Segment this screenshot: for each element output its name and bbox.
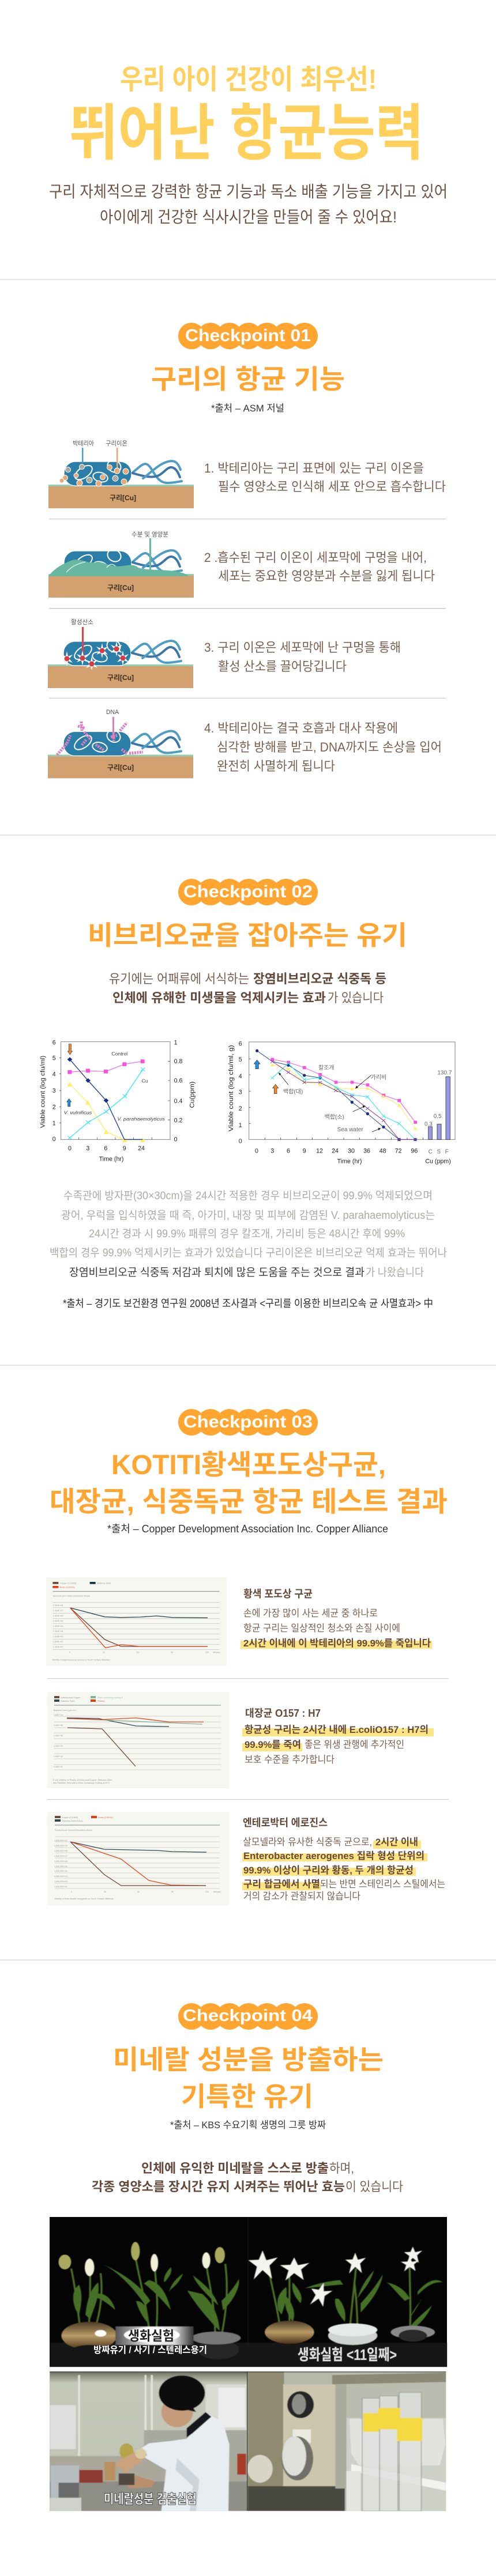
line and bar chart: shellfish vibrio count and copper <box>228 1041 455 1165</box>
chart: e.coli O157: Stainless Steel <box>61 1700 75 1702</box>
result text: staphylococcus: 손에 가장 많이 사는 세균 중 하나로 <box>243 1608 378 1619</box>
result text: e.coli: 대장균 O157 : H7 <box>245 1708 321 1719</box>
heading: vibrio: 비브리오균을 잡아주는 유기 <box>88 920 407 950</box>
heading: KOTITI test results: KOTITI황색포도상구균, <box>111 1450 386 1480</box>
diagram 1: bacteria meets copper ions: 구리이온 <box>106 440 127 447</box>
badge: checkpoint 02 <box>178 879 318 905</box>
line and bar chart: shellfish vibrio count and copper: F <box>445 1149 449 1155</box>
photo: mineral detection experiment <box>50 2371 446 2511</box>
chart: enterobacter aerogenes: 1,000,000+09 <box>54 1845 67 1847</box>
chart: staphylococcus aureus: 1.000E+07 <box>53 1610 63 1612</box>
line chart: vibrio count and Cu ppm by time: Control <box>111 1051 127 1057</box>
line and bar chart: shellfish vibrio count and copper: 1 <box>239 1122 242 1129</box>
chart: e.coli O157: 1.00E+02 <box>54 1755 63 1758</box>
line chart: vibrio count and Cu ppm by time: Time (hr) <box>99 1156 123 1163</box>
result text: e.coli: 항균성 구리는 2시간 내에 E.coliO157 : H7의 <box>245 1724 429 1735</box>
step 1 text: 필수 영양소로 인식해 세포 안으로 흡수합니다 <box>218 479 446 494</box>
line and bar chart: shellfish vibrio count and copper: 96 <box>411 1148 418 1155</box>
result text: staphylococcus: 황색 포도상 구균 <box>243 1588 313 1600</box>
panel: checkpoint 01 <box>48 323 446 778</box>
line and bar chart: shellfish vibrio count and copper: 가리비 <box>371 1074 386 1081</box>
chart: e.coli O157: 1.00E+10 <box>54 1714 63 1716</box>
study result text: 백합의 경우 99.9% 억제시키는 효과가 있었습니다 구리이온은 비브리오균 억제 효과는 뛰어나 <box>50 1247 447 1259</box>
result text: enterobacter: 되는 반면 스테인리스 스틸에서는 <box>320 1879 445 1890</box>
chart: e.coli O157: Silver-containing coating A <box>97 1697 123 1699</box>
step 4 text: 완전히 사멸하게 됩니다 <box>217 759 335 773</box>
step 4 text: 4. 박테리아는 결국 호흡과 대사 작용에 <box>204 721 398 735</box>
section divider <box>0 1365 496 1366</box>
study result text: 수족관에 방자판(30×30cm)을 24시간 적용한 경우 비브리오균이 99.9% 억제되었으며 <box>63 1189 433 1202</box>
line chart: vibrio count and Cu ppm by time: 4 <box>52 1071 56 1078</box>
chart: enterobacter aerogenes: Minutes <box>213 1891 221 1893</box>
result text: enterobacter: Enterobacter aerogenes 집락 형성 단위의 <box>243 1850 424 1861</box>
photo: lily flower experiment: 생화실험 <box>128 2328 174 2343</box>
chart: e.coli O157: Plastics <box>97 1700 105 1702</box>
chart: enterobacter aerogenes: 1,000,000+04 <box>54 1870 67 1872</box>
hero main title: 뛰어난 항균능력 <box>69 100 424 168</box>
result text: enterobacter: 2시간 이내 <box>375 1837 418 1848</box>
chart: enterobacter aerogenes: 1,000,000+02 <box>54 1880 67 1883</box>
chart: enterobacter aerogenes: 90 <box>171 1891 174 1893</box>
step 4 text: 심각한 방해를 받고, DNA까지도 손상을 입어 <box>217 740 442 754</box>
study result text: 광어, 우럭을 입식하였을 때 즉, 아가미, 내장 및 피부에 감염된 V. parahaemolyticus는 <box>61 1209 435 1222</box>
line chart: vibrio count and Cu ppm by time: 24 <box>138 1145 145 1152</box>
chart: e.coli O157: 1.00E+04 <box>54 1745 63 1747</box>
result text: enterobacter <box>242 1817 445 1902</box>
panel: checkpoint 03 <box>46 1409 449 1905</box>
badge: checkpoint 01 <box>178 323 318 349</box>
intro text: 이 있습니다 <box>345 2180 403 2194</box>
line chart: vibrio count and Cu ppm by time: 0 <box>52 1136 56 1143</box>
chart: staphylococcus aureus: Survivors per Carrier (Geometric Mean) <box>53 1595 90 1597</box>
line and bar chart: shellfish vibrio count and copper: 130.7 <box>437 1070 452 1076</box>
chart: enterobacter aerogenes: Brass (C26000) <box>98 1816 113 1819</box>
badge: checkpoint 01: Checkpoint 01 <box>185 326 311 345</box>
chart: staphylococcus aureus: 1.000E+05 <box>53 1620 63 1622</box>
heading: KOTITI test results: 대장균, 식중독균 항균 테스트 결과 <box>50 1487 448 1517</box>
chart: enterobacter aerogenes: 30 <box>104 1891 106 1893</box>
intro text: 인체에 유해한 미생물을 억제시키는 효과 <box>112 991 326 1005</box>
chart: enterobacter aerogenes: 1,000,000+08 <box>54 1850 67 1852</box>
line and bar chart: shellfish vibrio count and copper: 36 <box>363 1148 370 1155</box>
result text: enterobacter: 구리 합금에서 사멸 <box>243 1879 320 1890</box>
section divider <box>0 279 496 280</box>
chart: enterobacter aerogenes: 120 <box>205 1891 209 1893</box>
line chart: vibrio count and Cu ppm by time: 5 <box>52 1055 56 1062</box>
line chart: vibrio count and Cu ppm by time: V. vulnificus <box>64 1109 92 1115</box>
result text: e.coli <box>242 1708 434 1765</box>
diagram 1: bacteria meets copper ions: 구리[Cu] <box>110 494 136 502</box>
result text: staphylococcus: 2시간 이내에 이 박테리아의 99.9%를 죽입니다 <box>243 1638 431 1649</box>
line and bar chart: shellfish vibrio count and copper: 48 <box>379 1148 386 1155</box>
chart: staphylococcus aureus: Minutes <box>213 1652 220 1654</box>
line and bar chart: shellfish vibrio count and copper: 5 <box>239 1056 242 1063</box>
line chart: vibrio count and Cu ppm by time: V. parahaemolyticus <box>117 1116 165 1121</box>
chart: staphylococcus aureus: 1.000E+06 <box>53 1615 63 1617</box>
line chart: vibrio count and Cu ppm by time: 0.8 <box>174 1058 183 1065</box>
study result text: 가 나왔습니다 <box>366 1266 424 1279</box>
photo: lily flower experiment: 생화실험 <11일째> <box>298 2346 397 2363</box>
chart: enterobacter aerogenes: Stainless Steel (S304) <box>62 1820 82 1822</box>
study result text: 장염비브리오균 식중독 저감과 퇴치에 많은 도움을 주는 것으로 결과 <box>69 1266 365 1279</box>
line chart: vibrio count and Cu ppm by time: 3 <box>52 1087 56 1094</box>
line chart: vibrio count and Cu ppm by time: 0 <box>174 1136 178 1143</box>
line and bar chart: shellfish vibrio count and copper: 0 <box>255 1148 258 1155</box>
intro text: 각종 영양소를 장시간 유지 시켜주는 뛰어난 효능 <box>92 2180 345 2194</box>
line chart: vibrio count and Cu ppm by time <box>40 1039 196 1163</box>
line and bar chart: shellfish vibrio count and copper: 6 <box>287 1148 290 1155</box>
chart: enterobacter aerogenes: 1,000,000+01 <box>54 1886 67 1888</box>
line and bar chart: shellfish vibrio count and copper: 0.5 <box>434 1113 442 1120</box>
step 3 text <box>204 640 401 674</box>
line chart: vibrio count and Cu ppm by time: 1 <box>174 1039 178 1046</box>
line and bar chart: shellfish vibrio count and copper: 3 <box>270 1148 274 1155</box>
chart: staphylococcus aureus: Stainless Steel <box>97 1582 111 1584</box>
chart: enterobacter aerogenes: 1,000,000+06 <box>54 1860 67 1863</box>
intro text: 하며, <box>329 2161 354 2175</box>
section divider <box>0 834 496 836</box>
line chart: vibrio count and Cu ppm by time: Viable count (log cfu/ml) <box>40 1056 47 1128</box>
result text: e.coli: 좋은 위생 관행에 추가적인 <box>305 1739 404 1750</box>
photo: lily flower experiment <box>50 2217 447 2367</box>
result text: e.coli: 보호 수준을 추가합니다 <box>245 1754 335 1765</box>
panel: checkpoint 02 <box>40 879 455 1309</box>
step 2 text: 세포는 중요한 영양분과 수분을 잃게 됩니다 <box>218 569 435 583</box>
chart: enterobacter aerogenes: 1,000,000+03 <box>54 1875 67 1878</box>
intro text <box>92 2161 403 2194</box>
line and bar chart: shellfish vibrio count and copper: 4 <box>239 1073 242 1080</box>
chart: e.coli O157: Antimicrobial Copper <box>61 1697 81 1699</box>
study result text: 24시간 경과 시 99.9% 패류의 경우 칼조개, 가리비 등은 48시간 후에 99% <box>89 1227 405 1240</box>
chart: enterobacter aerogenes: 1,000,000+07 <box>54 1855 67 1857</box>
chart: enterobacter aerogenes: Viability of Enterobacter aerogenes on Touch Surface Materials <box>54 1898 114 1900</box>
chart: staphylococcus aureus: Copper (C11000) <box>60 1582 76 1584</box>
line and bar chart: shellfish vibrio count and copper: Time (hr) <box>337 1158 362 1165</box>
badge: checkpoint 03 <box>178 1409 318 1436</box>
chart: staphylococcus aureus: 60 <box>137 1652 139 1654</box>
line and bar chart: shellfish vibrio count and copper: C <box>429 1149 433 1155</box>
line and bar chart: shellfish vibrio count and copper: S <box>437 1149 441 1155</box>
intro text: 인체에 유익한 미네랄을 스스로 방출 <box>141 2161 329 2175</box>
step 2 text <box>204 550 435 583</box>
hero description: 구리 자체적으로 강력한 항균 기능과 독소 배출 기능을 가지고 있어 <box>49 183 448 201</box>
heading: copper antibacterial function: 구리의 항균 기능 <box>151 364 345 394</box>
chart: staphylococcus aureus <box>46 1577 227 1665</box>
line chart: vibrio count and Cu ppm by time: 1 <box>52 1120 56 1127</box>
chart: enterobacter aerogenes: 1,000,000+10 <box>54 1840 67 1842</box>
chart: e.coli O157: E.coli Viability on Plastic, Antimicrobial Copper, Stainless Steel, <box>53 1779 112 1781</box>
intro text: 유기에는 어패류에 서식하는 <box>109 972 249 986</box>
line and bar chart: shellfish vibrio count and copper: 6 <box>239 1041 242 1048</box>
chart: e.coli O157: Bacteria Count (per mL) <box>54 1709 76 1712</box>
hero section <box>49 65 448 226</box>
diagram 4: DNA damage: 구리[Cu] <box>107 764 134 772</box>
diagram 2: nutrients leaking from cell: 수분 및 영양분 <box>131 531 168 538</box>
line chart: vibrio count and Cu ppm by time: 0.4 <box>174 1098 183 1105</box>
chart: e.coli O157: 1.00E+08 <box>54 1724 63 1727</box>
line and bar chart: shellfish vibrio count and copper: Sea water <box>337 1127 363 1133</box>
chart: staphylococcus aureus: 0 <box>69 1652 70 1654</box>
diagram 1: bacteria meets copper ions: 박테리아 <box>73 440 94 447</box>
diagram 4: DNA damage: DNA <box>106 709 119 716</box>
line chart: vibrio count and Cu ppm by time: 0.6 <box>174 1078 183 1085</box>
line and bar chart: shellfish vibrio count and copper: Cu (ppm) <box>425 1158 451 1165</box>
chart: staphylococcus aureus: 1.000E+01 <box>53 1646 63 1648</box>
heading: mineral releasing brassware: 미네랄 성분을 방출하는 <box>113 2045 384 2075</box>
chart: enterobacter aerogenes: 0 <box>71 1891 72 1893</box>
heading: mineral releasing brassware <box>113 2045 384 2112</box>
chart: staphylococcus aureus: 120 <box>205 1652 209 1654</box>
chart: e.coli O157 <box>47 1692 229 1788</box>
step 3 text: 3. 구리 이온은 세포막에 난 구멍을 통해 <box>204 640 401 655</box>
chart: staphylococcus aureus: 90 <box>171 1652 173 1654</box>
photo: mineral detection experiment: 미네랄성분 검출실험 <box>104 2492 197 2506</box>
line chart: vibrio count and Cu ppm by time: Cu(ppm) <box>189 1082 196 1108</box>
chart: staphylococcus aureus: 1.000E+05 <box>53 1625 63 1627</box>
intro text <box>109 972 386 1005</box>
source note: *출처 – Copper Development Association Inc. Copper Alliance <box>107 1523 388 1535</box>
chart: staphylococcus aureus: 1.000E+04 <box>53 1630 63 1633</box>
diagram 2: nutrients leaking from cell: 구리[Cu] <box>107 584 134 592</box>
line chart: vibrio count and Cu ppm by time: 6 <box>52 1039 56 1046</box>
line chart: vibrio count and Cu ppm by time: 0 <box>68 1145 72 1152</box>
source note: *출처 – ASM 저널 <box>211 403 284 414</box>
line chart: vibrio count and Cu ppm by time: 2 <box>52 1104 56 1111</box>
badge: checkpoint 03: Checkpoint 03 <box>183 1412 313 1431</box>
heading: KOTITI test results <box>50 1450 448 1517</box>
line chart: vibrio count and Cu ppm by time: 3 <box>86 1145 89 1152</box>
step 1 text <box>204 461 446 494</box>
diagram 3: reactive oxygen: 구리[Cu] <box>107 674 134 682</box>
chart: staphylococcus aureus: 1.000E+03 <box>53 1636 63 1638</box>
intro text: 가 있습니다 <box>328 991 384 1005</box>
intro text: 장염비브리오균 식중독 등 <box>253 972 386 986</box>
line and bar chart: shellfish vibrio count and copper: 0.3 <box>424 1121 433 1127</box>
study result text <box>50 1189 447 1279</box>
hero description: 아이에게 건강한 식사시간을 만들어 줄 수 있어요! <box>100 208 397 226</box>
chart: e.coli O157: 1.00E+00 <box>54 1766 63 1768</box>
line and bar chart: shellfish vibrio count and copper: 백합(소) <box>325 1113 344 1120</box>
result text: enterobacter: 살모넬라와 유사한 식중독 균으로, <box>243 1837 372 1848</box>
result text: e.coli: 99.9%를 죽여 <box>245 1739 301 1750</box>
line and bar chart: shellfish vibrio count and copper: 72 <box>395 1148 402 1155</box>
line and bar chart: shellfish vibrio count and copper: 30 <box>348 1148 355 1155</box>
diagram 2: nutrients leaking from cell <box>48 531 194 598</box>
heading: mineral releasing brassware: 기특한 유기 <box>181 2082 313 2112</box>
diagram 3: reactive oxygen <box>48 618 193 688</box>
line chart: vibrio count and Cu ppm by time: Cu <box>142 1078 148 1084</box>
step 4 text <box>204 721 442 773</box>
step 1 text: 1. 박테리아는 구리 표면에 있는 구리 이온을 <box>204 461 424 475</box>
hero kicker title: 우리 아이 건강이 최우선! <box>120 65 377 95</box>
line and bar chart: shellfish vibrio count and copper: 3 <box>239 1089 242 1096</box>
result text: staphylococcus: 항균 구리는 일상적인 청소와 손질 사이에 <box>243 1623 400 1634</box>
diagram 1: bacteria meets copper ions <box>48 440 194 508</box>
chart: enterobacter aerogenes: Survivors per Carrier (Geometric Mean) <box>55 1829 92 1831</box>
chart: enterobacter aerogenes: 1,000,000+05 <box>54 1865 67 1868</box>
result text: staphylococcus <box>241 1588 432 1649</box>
badge: checkpoint 02: Checkpoint 02 <box>183 882 313 901</box>
line and bar chart: shellfish vibrio count and copper: 칼조개 <box>318 1064 335 1071</box>
chart: e.coli O157: and Stainless Steel with a Silver-Containing Coating at 20°C <box>53 1782 110 1784</box>
chart: enterobacter aerogenes: 60 <box>137 1891 140 1893</box>
chart: staphylococcus aureus: Viability of Staphylococcus aureus on Touch Surface Materials <box>52 1659 110 1661</box>
section divider <box>0 1959 496 1961</box>
result text: enterobacter: 엔테로박터 에로진스 <box>243 1817 328 1829</box>
line chart: vibrio count and Cu ppm by time: 6 <box>104 1145 107 1152</box>
hero description <box>49 183 448 226</box>
line and bar chart: shellfish vibrio count and copper: 12 <box>316 1148 323 1155</box>
diagram 3: reactive oxygen: 활성산소 <box>71 618 93 626</box>
diagram 4: DNA damage <box>48 709 193 778</box>
photo: lily flower experiment: 방짜유기 / 사기 / 스텐레스용기 <box>93 2345 207 2355</box>
step 3 text: 활성 산소를 끌어당깁니다 <box>218 659 347 674</box>
line and bar chart: shellfish vibrio count and copper: 백합(대) <box>283 1089 303 1096</box>
source note: *출처 – 경기도 보건환경 연구원 2008년 조사결과 <구리를 이용한 비브리오속 균 사멸효과> 中 <box>63 1298 433 1309</box>
chart: staphylococcus aureus: 30 <box>103 1652 105 1654</box>
line and bar chart: shellfish vibrio count and copper: 24 <box>332 1148 339 1155</box>
chart: staphylococcus aureus: 1.000E+02 <box>53 1641 63 1643</box>
result text: enterobacter: 99.9% 이상이 구리와 황동, 두 개의 항균성 <box>243 1865 414 1876</box>
chart: staphylococcus aureus: 1.000E+08 <box>53 1604 63 1607</box>
result text: enterobacter: 거의 감소가 관찰되지 않습니다 <box>243 1891 360 1902</box>
line chart: vibrio count and Cu ppm by time: 0.2 <box>174 1117 183 1124</box>
chart: staphylococcus aureus: Brass (C26000) <box>60 1586 75 1588</box>
line and bar chart: shellfish vibrio count and copper: Viable count (log cfu/ml, g) <box>228 1045 235 1131</box>
badge: checkpoint 04: Checkpoint 04 <box>183 2007 313 2025</box>
step 2 text: 2 .흡수된 구리 이온이 세포막에 구멍을 내어, <box>204 550 427 565</box>
line and bar chart: shellfish vibrio count and copper: 0 <box>239 1138 242 1145</box>
line and bar chart: shellfish vibrio count and copper: 2 <box>239 1105 242 1112</box>
source note: *출처 – KBS 수요기획 생명의 그릇 방짜 <box>170 2120 326 2131</box>
panel: checkpoint 04 <box>50 2003 447 2511</box>
chart: enterobacter aerogenes <box>47 1812 229 1905</box>
chart: e.coli O157: 1.00E+06 <box>54 1735 63 1737</box>
chart: enterobacter aerogenes: Copper (C11000) <box>62 1816 78 1819</box>
line chart: vibrio count and Cu ppm by time: 9 <box>123 1145 126 1152</box>
line and bar chart: shellfish vibrio count and copper: 9 <box>303 1148 306 1155</box>
badge: checkpoint 04 <box>178 2003 318 2030</box>
